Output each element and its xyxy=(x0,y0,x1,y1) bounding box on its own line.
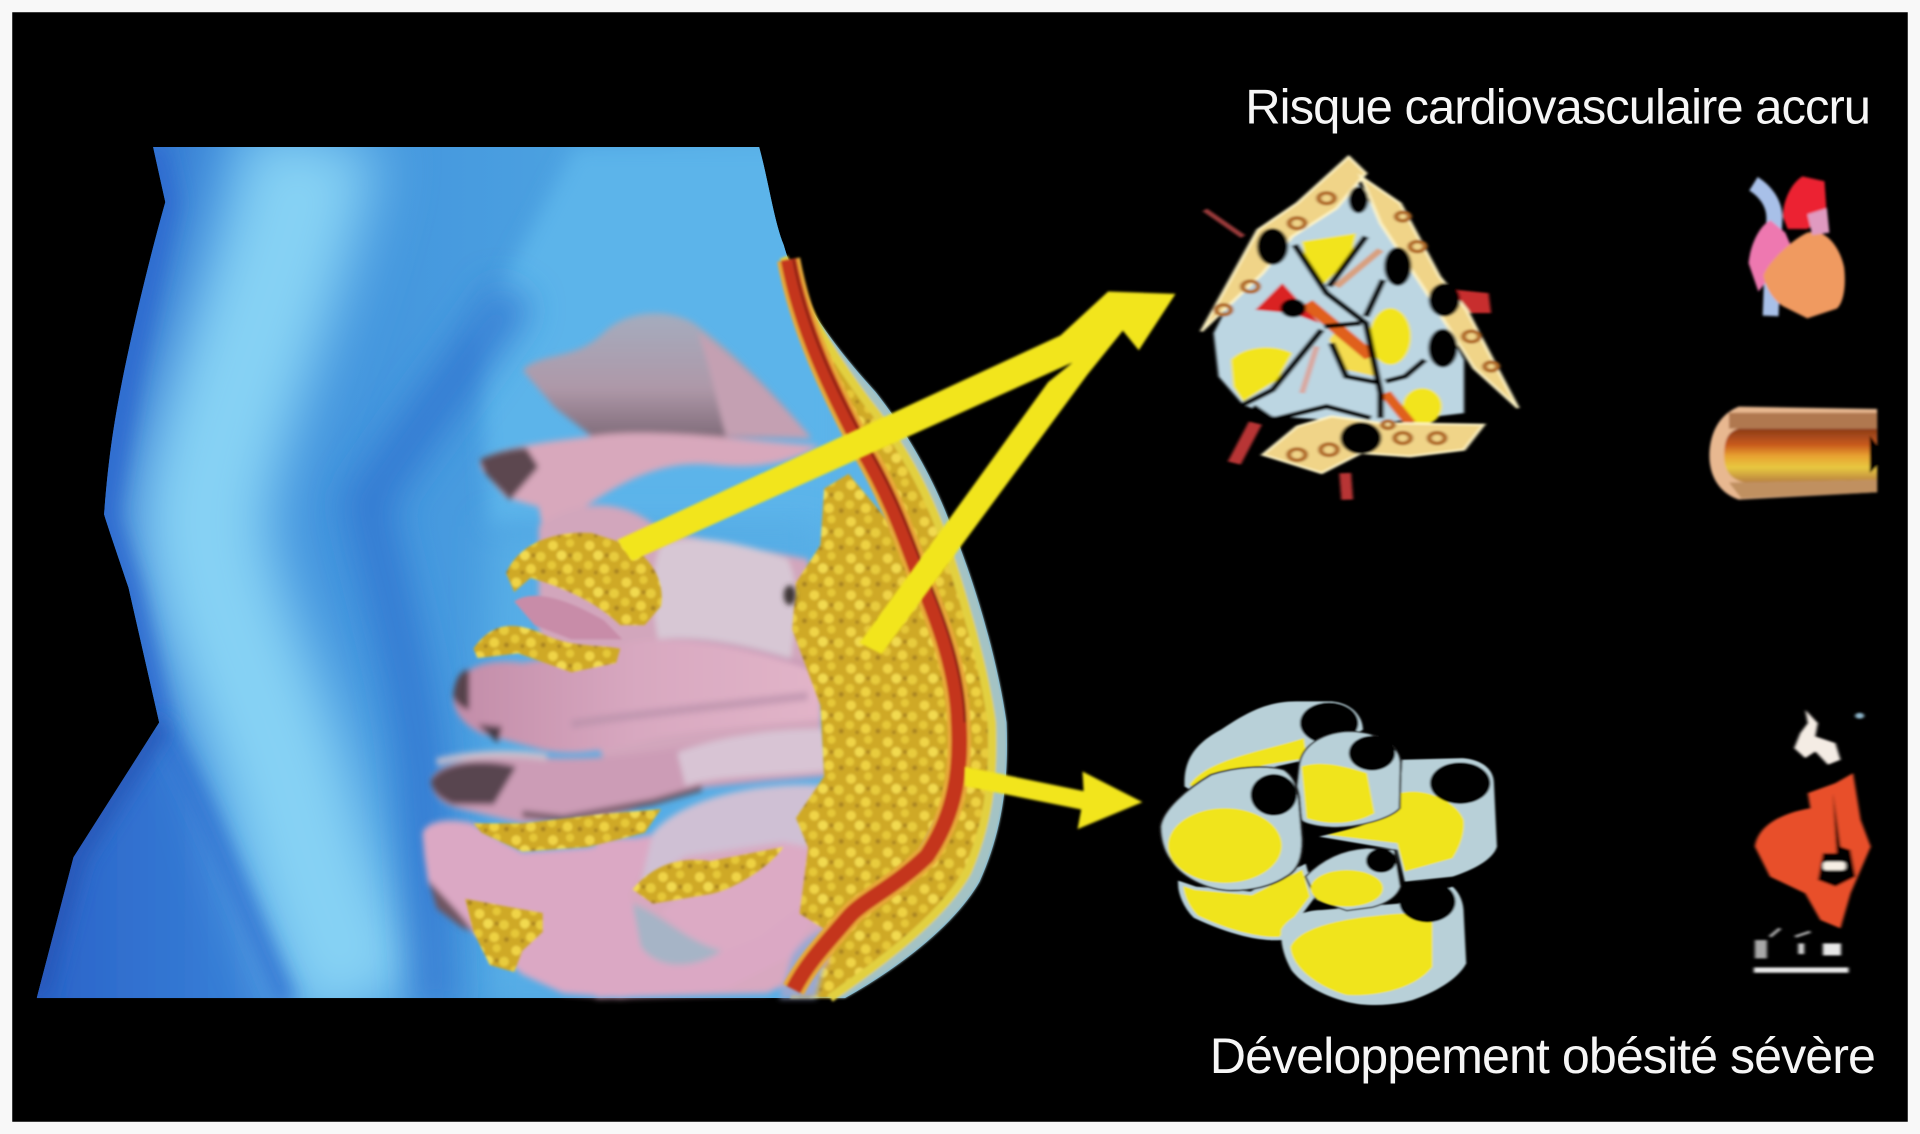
fat wall xyxy=(792,474,961,932)
icon: artery with plaque xyxy=(1709,407,1878,500)
fat deposit bottom xyxy=(465,899,543,972)
cell 7 xyxy=(1281,881,1466,1005)
red and orange vessels xyxy=(1255,283,1319,323)
fat deposit upper xyxy=(506,533,662,625)
arrow: visceral and wall fat to cardiovascular risk xyxy=(617,291,1176,654)
pink fold under fat xyxy=(514,596,622,639)
central mass xyxy=(539,505,824,776)
black membranes xyxy=(1243,237,1425,420)
pale cells xyxy=(1214,163,1464,423)
vessels xyxy=(1205,210,1243,237)
fold a xyxy=(453,640,820,753)
nuclei xyxy=(1257,228,1288,265)
beige bands with rings xyxy=(1201,157,1366,331)
fat deposit centre xyxy=(632,847,783,904)
lower pink underlay xyxy=(596,838,828,998)
second fold xyxy=(480,433,820,531)
fat deposit second xyxy=(473,626,620,672)
cell 4 xyxy=(1160,767,1302,891)
rectus muscle band xyxy=(789,260,965,989)
cell 3 xyxy=(1319,758,1497,882)
icon: heart xyxy=(1749,176,1845,318)
red shape xyxy=(1755,773,1871,928)
heading: cardiovascular risk: Risque cardiovasculaire accru xyxy=(1245,81,1871,135)
cell 6 xyxy=(1306,848,1401,911)
abdominal wall: skin and subcutaneous fat layer xyxy=(779,245,1007,998)
heading: severe obesity: Développement obésité sévère xyxy=(1210,1028,1876,1084)
base marks xyxy=(1754,967,1849,973)
lavender lower loop xyxy=(641,785,824,885)
cell 5 xyxy=(1181,867,1313,939)
white fragments xyxy=(1794,710,1840,765)
body silhouette in blue xyxy=(24,135,1016,1010)
illustration: inflamed visceral adipose tissue xyxy=(1201,157,1518,500)
upper fold xyxy=(522,313,812,439)
fold b xyxy=(431,729,828,823)
fat strip xyxy=(473,809,661,852)
cell 2 xyxy=(1296,731,1401,827)
intestines xyxy=(422,313,832,998)
visceral fat deposits xyxy=(465,533,783,972)
illustration: abdomen cross-section xyxy=(24,135,1016,1010)
arrow: subcutaneous fat to severe obesity xyxy=(965,767,1142,829)
small dark hollow beside fat wall xyxy=(784,585,796,605)
fold c xyxy=(422,821,816,998)
icon: flame-like organ xyxy=(1754,710,1871,973)
yellow lipid xyxy=(1231,347,1292,401)
illustration: enlarged subcutaneous adipocytes xyxy=(1160,701,1497,1005)
cell 1 xyxy=(1184,701,1363,793)
